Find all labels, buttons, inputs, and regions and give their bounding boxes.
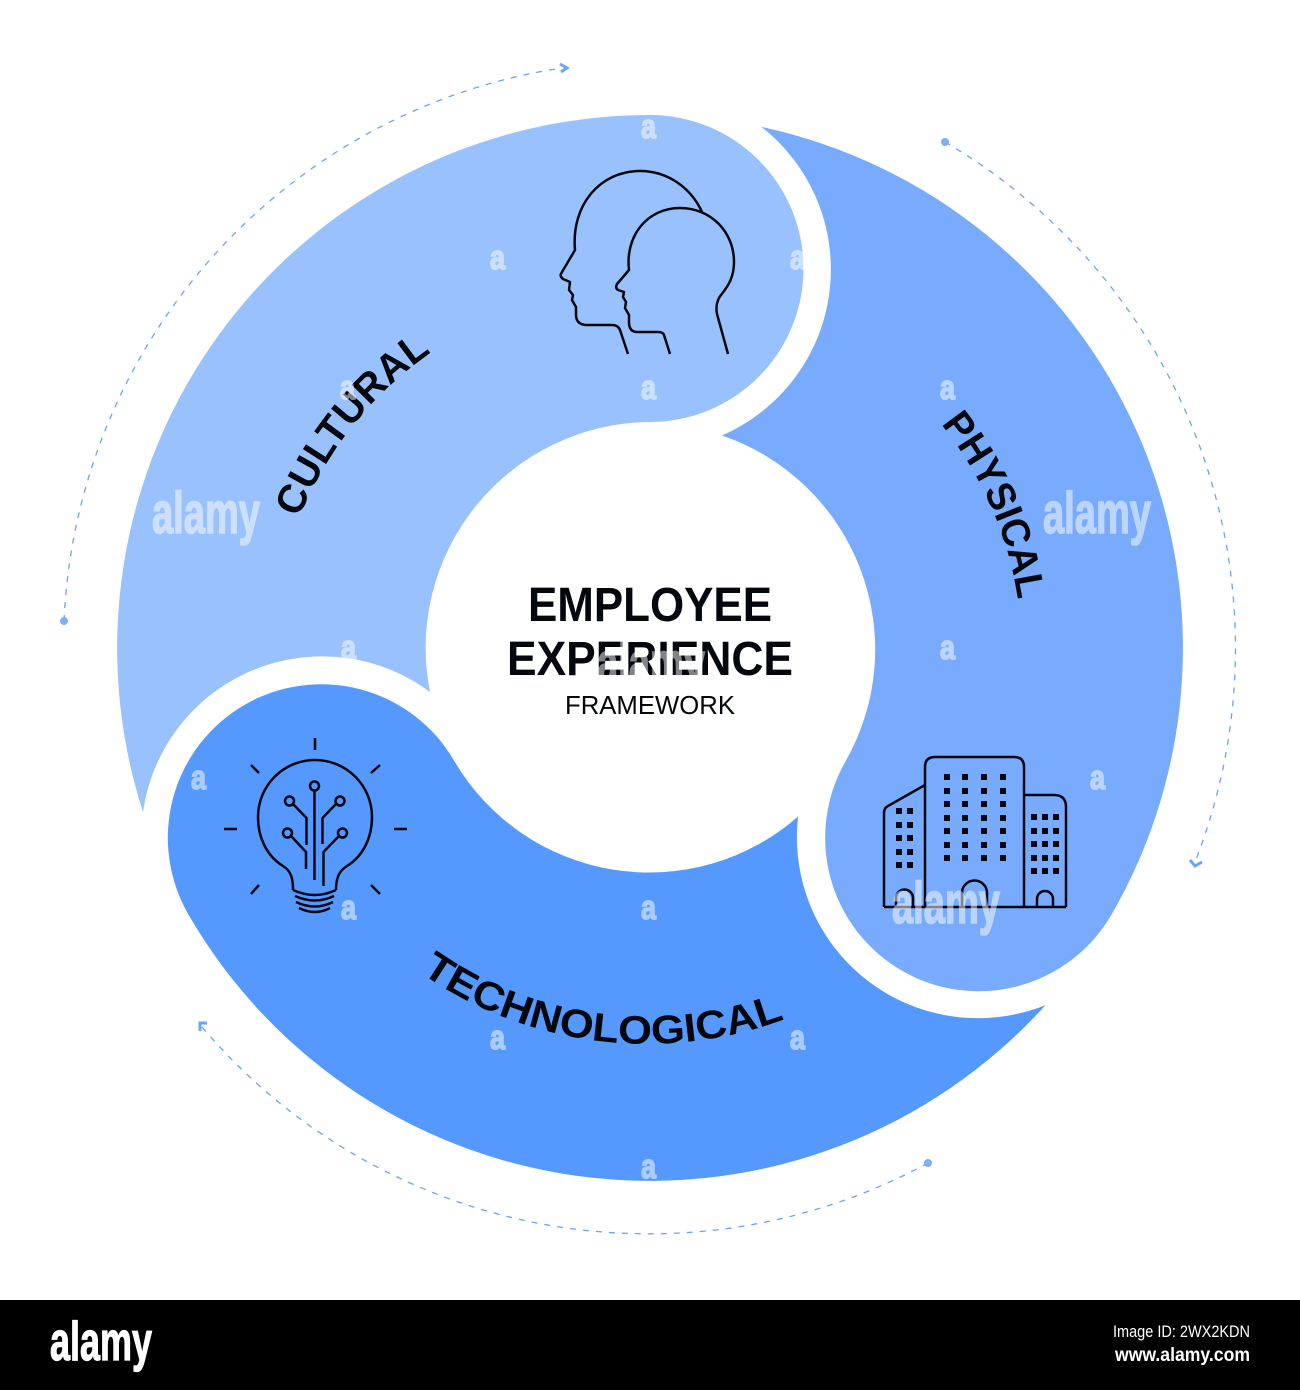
title: employee experience framework: EXPERIENCE — [507, 633, 793, 686]
watermark: stock logos — [152, 108, 1151, 1186]
watermark: stock logos: alamy — [1043, 481, 1151, 546]
watermark: stock logos: alamy — [892, 871, 1000, 936]
watermark: stock logos: a — [641, 889, 657, 927]
footer bar: alamy — [50, 1310, 152, 1372]
icon: office buildings — [884, 757, 1066, 907]
watermark: stock logos: a — [641, 1148, 657, 1186]
watermark: stock logos: a — [641, 108, 657, 146]
watermark: stock logos: a — [490, 1019, 506, 1057]
icon: two head profiles — [561, 171, 734, 354]
watermark: stock logos: a — [1090, 759, 1106, 797]
watermark: stock logos: alamy — [597, 631, 705, 696]
title: employee experience framework: EMPLOYEE — [528, 579, 772, 632]
watermark: stock logos: a — [790, 239, 806, 277]
arrow: dashed arc around technological — [200, 1023, 932, 1234]
footer bar — [0, 1300, 1300, 1390]
title: employee experience framework — [507, 579, 793, 720]
label: technological: TECHNOLOGICAL — [430, 950, 784, 1044]
label: physical: PHYSICAL — [942, 410, 1042, 598]
panel: physical segment — [431, 105, 1300, 1047]
arrow: dashed arc around cultural — [60, 64, 567, 625]
watermark: stock logos: a — [490, 239, 506, 277]
watermark: stock logos: a — [341, 629, 357, 667]
arrow: dashed arc around physical — [941, 138, 1235, 866]
panel: cultural segment — [117, 115, 803, 812]
watermark: stock logos: a — [641, 369, 657, 407]
watermark: stock logos: a — [341, 889, 357, 927]
watermark: stock logos: a — [191, 759, 207, 797]
watermark: stock logos: a — [940, 629, 956, 667]
footer bar: www.alamy.com — [1114, 1345, 1250, 1366]
watermark: stock logos: alamy — [152, 481, 260, 546]
label: cultural: CULTURAL — [278, 340, 430, 512]
icon: light bulb with circuit — [224, 738, 407, 912]
panel: technological segment — [112, 433, 1058, 1376]
footer bar: Image ID: 2WX2KDN — [1113, 1322, 1250, 1341]
watermark: stock logos: a — [940, 369, 956, 407]
watermark: stock logos: a — [790, 1019, 806, 1057]
title: employee experience framework: FRAMEWORK — [565, 690, 736, 720]
watermark: stock logos: a — [340, 369, 356, 407]
